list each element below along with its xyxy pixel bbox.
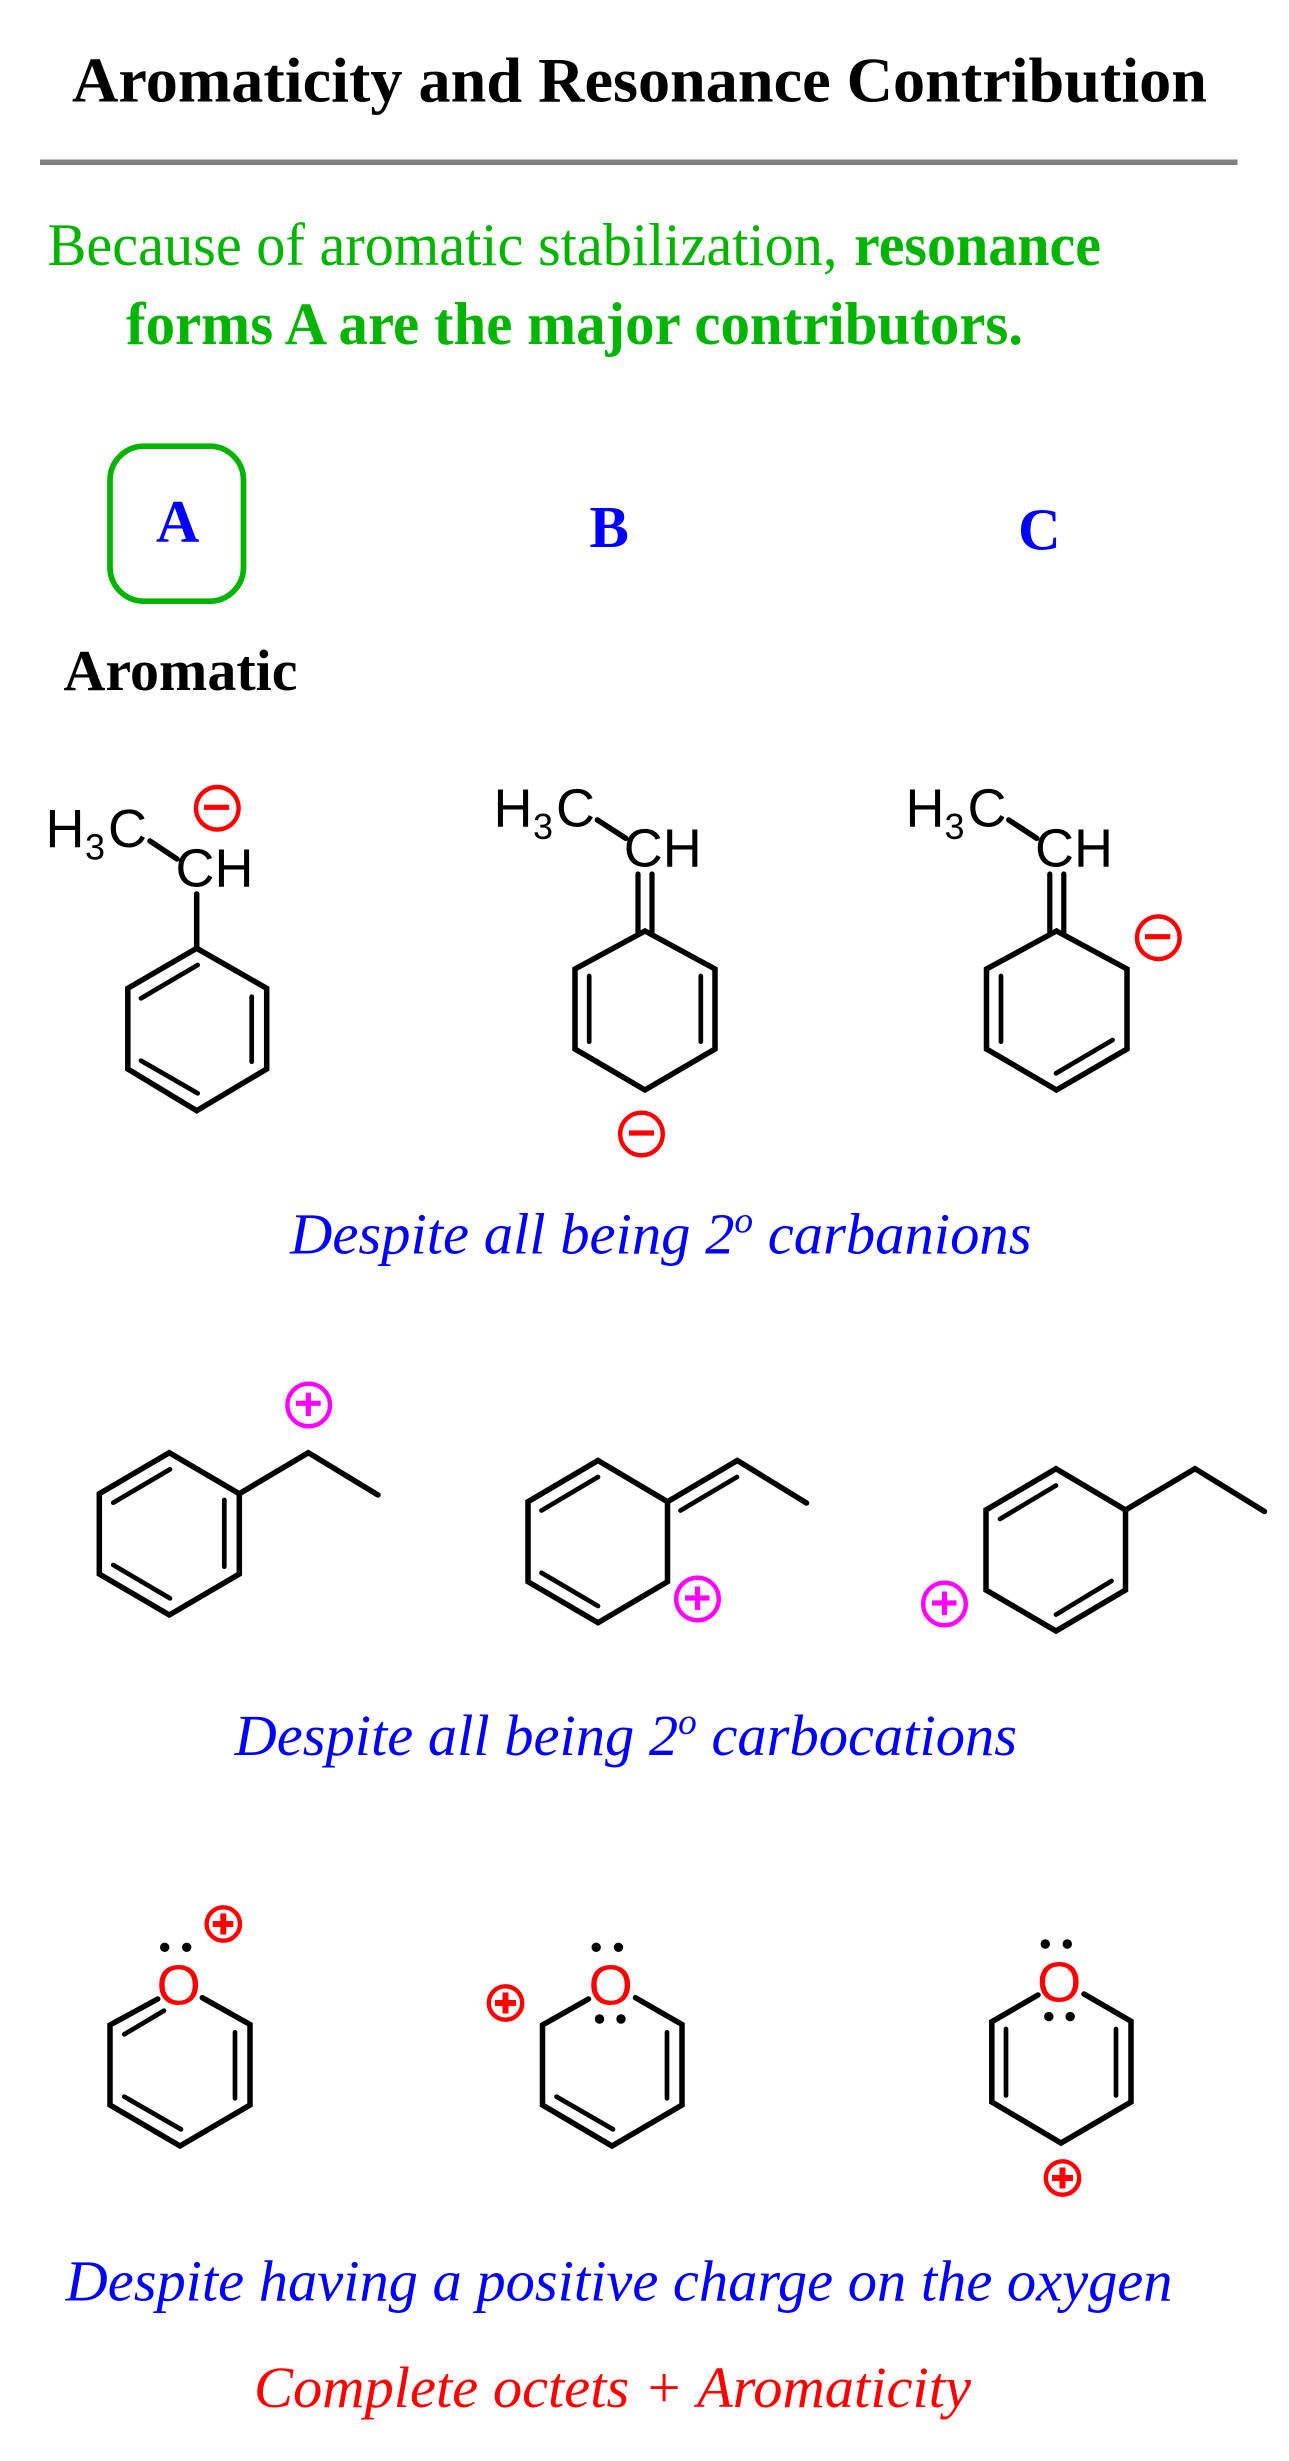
carbocation B [528,1460,806,1623]
title: Aromaticity and Resonance Contribution [72,44,1207,116]
oxygen atom: O [156,1954,201,2018]
carbanion C [906,779,1180,1090]
caption: carbanions: o [734,1200,753,1241]
carbanion A [46,787,267,1111]
plus charge [489,1986,522,2020]
caption: carbocations: Despite all being 2 [234,1703,674,1768]
carbanion C: 3 [944,806,965,847]
intro text: Because of aromatic stabilization, [48,212,838,278]
highlight box around A [110,446,244,601]
plus charge [287,1384,330,1426]
caption: carbocations: o [678,1702,697,1743]
minus charge [620,1113,663,1155]
lone pairs [592,1943,626,2024]
carbocation C [923,1469,1264,1631]
carbanion B: 3 [533,806,553,847]
carbanion A: H [46,799,84,859]
lone pair [160,1943,191,1952]
title rule [40,160,1238,165]
carbanion B: H [494,779,532,839]
oxygen atom: O [588,1954,633,2018]
carbanion A: CH [176,839,254,899]
plus charge [676,1578,719,1620]
carbanion C: H [906,779,944,839]
caption: oxygen: Despite having a positive charge on the oxygen [64,2248,1173,2314]
caption: octets and aromaticity: Complete octets + Aromaticity [254,2355,971,2420]
carbocation A [99,1384,378,1615]
intro text: resonance [854,212,1101,278]
caption: carbanions: carbanions [753,1201,1032,1266]
lone pairs [1041,1939,1075,2021]
caption: carbanions: Despite all being 2 [290,1201,730,1266]
oxonium B [489,1943,682,2146]
carbanion B [494,779,715,1155]
carbanion B: CH [624,819,702,879]
oxonium A [110,1907,250,2146]
column label A: A [156,488,199,554]
carbanion A: C [108,799,147,859]
carbanion C: CH [1035,819,1113,879]
oxonium C [992,1939,1131,2195]
minus charge [196,787,239,830]
column label C: C [1018,496,1061,562]
column label B: B [590,494,629,560]
intro text [48,212,1101,357]
minus charge [1137,916,1180,959]
carbanion A: 3 [85,826,105,868]
plus charge [207,1907,240,1941]
carbanion C: C [968,779,1006,839]
plus charge [1046,2161,1079,2195]
caption: carbocations: carbocations [697,1703,1017,1768]
plus charge [923,1583,966,1625]
intro text: forms A are the major contributors. [126,291,1023,357]
oxygen atom: O [1037,1950,1081,2014]
carbanion B: C [556,779,595,839]
aromatic label: Aromatic [64,638,298,703]
